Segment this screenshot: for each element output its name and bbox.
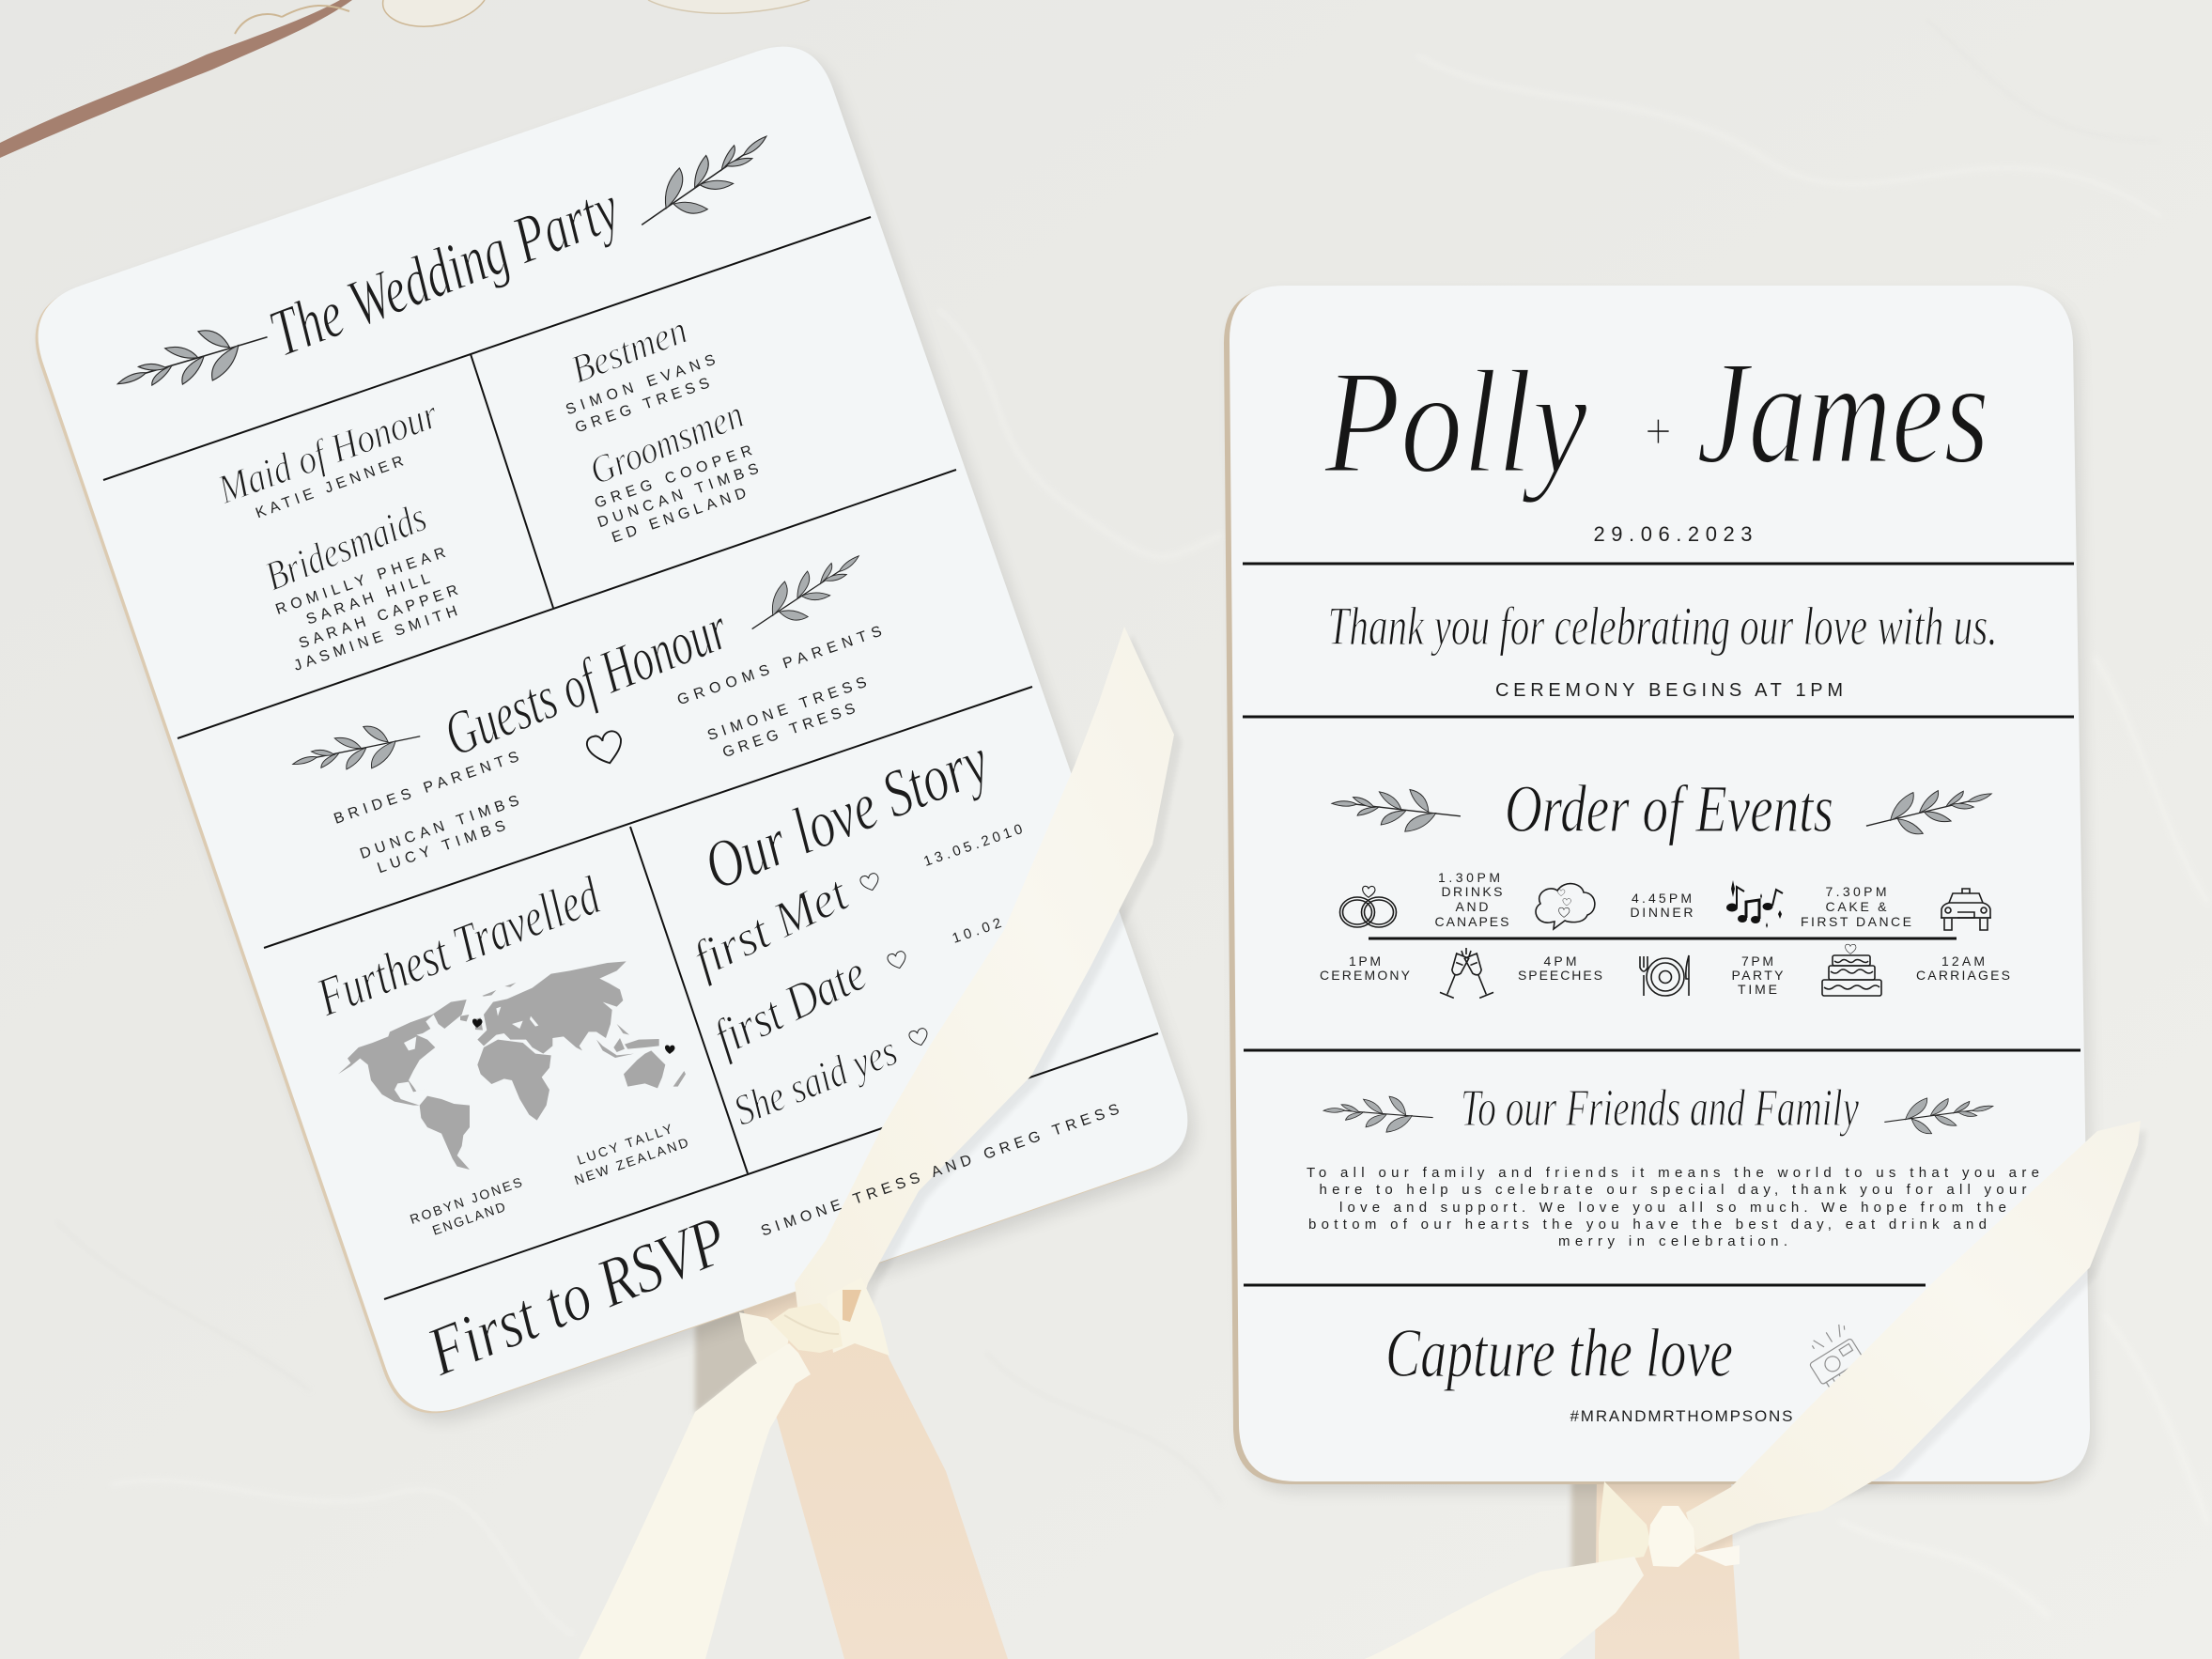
text: brides parents: BRIDES PARENTS	[332, 749, 521, 828]
label: 1.30pm drinks and canapes: AND	[1456, 899, 1488, 914]
panel: capture the love	[1385, 1315, 1871, 1425]
label: 1.30pm drinks and canapes: DRINKS	[1441, 884, 1503, 899]
label: 7.30pm cake and first dance	[1801, 884, 1911, 929]
heading: Maid of Honour: Maid of Honour	[211, 391, 444, 513]
heading: To our Friends and Family: To our Friends and Family	[1461, 1079, 1859, 1138]
icon: heart	[585, 729, 626, 768]
date: 29.06.2023: 29.06.2023	[1593, 522, 1753, 546]
name list: bridesmaids: SARAH CAPPER	[297, 582, 460, 652]
name list: groomsmen	[593, 442, 761, 546]
label: Robyn Jones England: ENGLAND	[430, 1199, 507, 1238]
label: 1pm ceremony: 1PM	[1349, 954, 1381, 969]
text: hashtag: #MRANDMRTHOMPSONS	[1570, 1407, 1792, 1425]
label: 7.30pm cake and first dance: CAKE &	[1826, 899, 1887, 914]
heading: Guests of Honour: Guests of Honour	[435, 595, 737, 769]
left fan: cream ribbon and knot	[579, 627, 1182, 1659]
right fan: wooden handle	[1595, 1475, 1740, 1659]
right fan: card panel	[1224, 286, 2094, 1491]
label: 1pm ceremony: CEREMONY	[1320, 968, 1411, 983]
left fan: shadow under card near handle	[695, 1301, 761, 1414]
name list: bridesmaids: SARAH HILL	[304, 570, 432, 628]
label: Lucy Tally New Zealand: LUCY TALLY	[575, 1121, 674, 1168]
icon: small heart	[887, 950, 908, 970]
icon: camera with flash	[1800, 1323, 1871, 1395]
label: 7pm party time	[1732, 954, 1784, 997]
date: first date: 10.02	[951, 915, 1003, 947]
name list: bridesmaids: ROMILLY PHEAR	[273, 545, 448, 618]
panel: to our friends and family	[1307, 1079, 2039, 1249]
text: thank-you paragraph: To all our family and friends it means the world to us that you are	[1307, 1165, 2039, 1181]
map: world silhouette	[338, 961, 686, 1170]
heading: Bridesmaids: Bridesmaids	[258, 494, 433, 599]
title: Polly + James: James	[1696, 331, 1989, 495]
right fan: shadow beside handle	[1571, 1480, 1601, 1572]
label: 1.30pm drinks and canapes: 1.30PM	[1438, 870, 1500, 885]
panel: our love story	[684, 722, 1025, 1135]
text: thank-you paragraph	[1307, 1165, 2039, 1249]
panel: order of events	[1320, 771, 2010, 998]
panel: furthest travelled	[308, 864, 690, 1238]
label: Lucy Tally New Zealand: NEW ZEALAND	[572, 1135, 690, 1187]
label: 7pm party time: PARTY	[1732, 968, 1784, 983]
label: 7pm party time: 7PM	[1741, 954, 1773, 969]
panel: bridal party	[211, 391, 460, 674]
label: 1.30pm drinks and canapes	[1435, 870, 1508, 929]
name list: bridesmaids: JASMINE SMITH	[292, 603, 459, 674]
name list: bestmen: SIMON EVANS	[564, 352, 718, 418]
heading: Order of Events: Order of Events	[1505, 771, 1833, 846]
heading: Furthest Travelled: Furthest Travelled	[308, 864, 609, 1028]
icon: leaf sprig lower left	[289, 719, 424, 779]
icon: wedding cake	[1822, 944, 1881, 996]
left fan: wooden handle	[742, 1278, 1008, 1659]
label: 7pm party time: TIME	[1738, 982, 1777, 997]
right fan: cream ribbon and knot	[1365, 1121, 2146, 1659]
label: 7.30pm cake and first dance: 7.30PM	[1826, 884, 1886, 899]
text: thank-you paragraph: here to help us celebrate our special day, thank you for all your	[1319, 1182, 2027, 1198]
label: 4.45pm dinner: 4.45PM	[1632, 891, 1692, 906]
icon: map markers	[472, 1019, 674, 1054]
heading: Groomsmen: Groomsmen	[584, 393, 750, 494]
heading: First to RSVP: First to RSVP	[417, 1202, 738, 1391]
text: Duncan and Lucy Timbs: DUNCAN TIMBS	[358, 793, 521, 862]
text: Simone and Greg Tress: GREG TRESS	[720, 701, 858, 761]
text: Duncan and Lucy Timbs: LUCY TIMBS	[376, 818, 507, 876]
heading: The Wedding Party: The Wedding Party	[260, 170, 628, 371]
name: Katie Jenner: KATIE JENNER	[254, 454, 406, 521]
title: Polly + James	[1323, 331, 1989, 504]
icon: leaf sprig right of heading	[626, 121, 783, 242]
text: RSVP names: SIMONE TRESS AND GREG TRESS	[759, 1102, 1121, 1239]
left fan: card panel	[36, 47, 1193, 1420]
icon: taxi car	[1941, 889, 1991, 930]
icon: leaf sprig right	[1862, 779, 1996, 843]
label: 4.45pm dinner	[1631, 891, 1693, 920]
icon: small heart	[859, 872, 881, 892]
icon: leaf sprig left of heading	[110, 317, 274, 401]
label: 12am carriages: CARRIAGES	[1916, 968, 2010, 983]
title: Polly + James: +	[1642, 403, 1674, 461]
name list: groomsmen: ED ENGLAND	[610, 486, 749, 546]
label: 7.30pm cake and first dance: FIRST DANCE	[1801, 914, 1911, 929]
label: 1pm ceremony	[1320, 954, 1411, 983]
icon: leaf sprig left	[1322, 1088, 1435, 1139]
text: thank-you paragraph: love and support. We love you all so much. We hope from the	[1339, 1200, 2006, 1216]
label: 12am carriages	[1916, 954, 2010, 983]
heading: Our love Story: Our love Story	[694, 722, 998, 905]
icon: leaf sprig left	[1329, 777, 1463, 841]
name list: groomsmen: DUNCAN TIMBS	[596, 461, 761, 531]
icon: champagne flutes	[1440, 948, 1493, 998]
label: 4pm speeches: 4PM	[1544, 954, 1576, 969]
dried branch with honesty pods	[0, 0, 810, 158]
text: grooms parents: GROOMS PARENTS	[675, 624, 884, 708]
label: 1.30pm drinks and canapes: CANAPES	[1435, 914, 1508, 929]
date: first met: 13.05.2010	[921, 821, 1025, 870]
text: first Date: first Date	[705, 944, 874, 1066]
panel: groom party	[564, 309, 761, 546]
name list: groomsmen: GREG COOPER	[593, 442, 754, 512]
text: first Met: first Met	[684, 864, 858, 987]
text: thank-you paragraph: bottom of our hearts the you have the best day, eat drink and	[1308, 1217, 1987, 1233]
text: thank-you paragraph: merry in celebration.	[1558, 1233, 1787, 1249]
icon: music notes	[1726, 880, 1783, 928]
heading: Bestmen: Bestmen	[565, 309, 693, 392]
label: 4pm speeches	[1518, 954, 1602, 983]
icon: speech bubble with hearts	[1536, 884, 1595, 929]
timeline axis	[1369, 938, 1957, 939]
label: 4pm speeches: SPEECHES	[1518, 968, 1602, 983]
icon: plate and cutlery	[1640, 955, 1689, 996]
heading: Capture the love: Capture the love	[1385, 1315, 1733, 1392]
name list: bestmen: GREG TRESS	[573, 376, 712, 436]
text: ceremony begins: CEREMONY BEGINS AT 1PM	[1495, 680, 1843, 701]
label: Robyn Jones England: ROBYN JONES	[408, 1174, 524, 1227]
text: Simone and Greg Tress: SIMONE TRESS	[705, 674, 869, 744]
icon: small heart	[908, 1027, 930, 1047]
label: 12am carriages: 12AM	[1941, 954, 1985, 969]
title: Polly + James: Polly	[1323, 340, 1588, 504]
icon: wedding rings	[1339, 886, 1396, 927]
name list: bridesmaids	[273, 545, 460, 674]
icon: leaf sprig upper right	[739, 543, 873, 644]
label: 4.45pm dinner: DINNER	[1631, 905, 1693, 920]
icon: leaf sprig right	[1883, 1093, 1995, 1137]
panel: guests of honour	[289, 543, 884, 876]
text: She said yes: She said yes	[727, 1026, 904, 1135]
